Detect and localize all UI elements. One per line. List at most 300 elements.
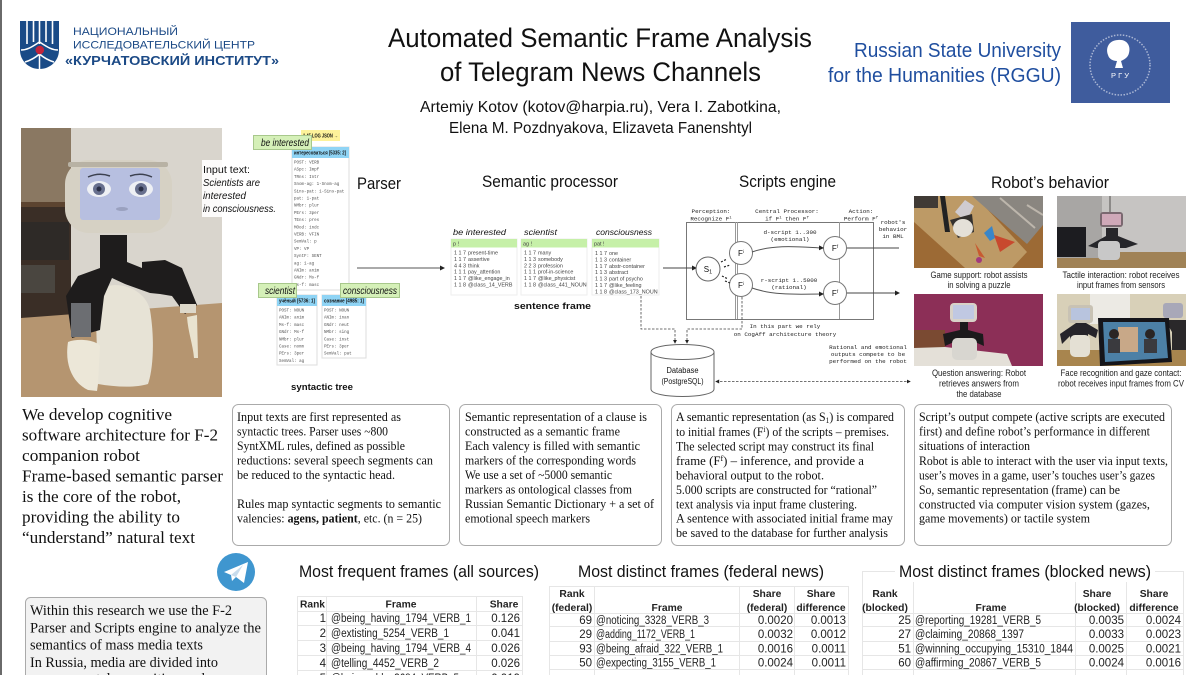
caption: question answering: the database [956, 388, 1002, 399]
panel: parser description: valencies: agens, patient, etc. (n = 25) [237, 512, 422, 526]
panel: parser description [232, 404, 450, 546]
photo: tactile interaction [1057, 196, 1186, 268]
frame: scientist: ag ! [523, 242, 532, 248]
frame: be interested: pay_attention [468, 270, 500, 276]
table: most frequent frames: @being_having_1794_VERB_4 [331, 643, 472, 655]
frame: scientist: somebody [538, 257, 563, 263]
main tree node: SemVal: p [294, 240, 317, 245]
university name: Russian State University [854, 40, 1061, 62]
panel: parser description: be reduced to the syntactic head. [237, 468, 395, 482]
log toolbar: 1.45 LOG JSON → [303, 134, 338, 140]
panel: scripts engine description: be saved to the database for further analysis [676, 526, 888, 540]
table: distinct frames federal: 50 [579, 658, 592, 670]
table: distinct frames federal: Frame [652, 603, 683, 614]
table: distinct frames federal: @being_afraid_322_VERB_1 [596, 644, 723, 656]
node: scientist: Case: nomn [279, 346, 305, 350]
main tree node: NMbr: plur [294, 204, 320, 209]
database [651, 344, 714, 396]
panel: scripts engine description: A sentence with associated initial frame may [676, 512, 894, 526]
table: distinct frames blocked: @reporting_19281_VERB_5 [915, 615, 1041, 627]
panel: robot behavior description: So, semantic representation (frame) can be [919, 483, 1120, 497]
scripts engine diagram: (rational) [771, 284, 807, 291]
node: consciousness [322, 295, 366, 358]
table: distinct frames blocked: 0.0024 [1089, 658, 1125, 670]
logo: Kurchatov Institute: «КУРЧАТОВСКИЙ ИНСТИТУТ» [65, 53, 279, 68]
caption: syntactic tree: syntactic tree [291, 382, 353, 393]
table: distinct frames federal: 0.0016 [758, 644, 793, 656]
table: distinct frames federal: 0.0012 [811, 629, 846, 641]
robot head [65, 160, 172, 233]
arrows: dashed links to database [641, 296, 910, 382]
authors: Artemiy Kotov (kotov@harpia.ru), Vera I. Zabotkina, [420, 99, 781, 116]
panel: robot behavior description: first) and define robot’s performance in different [919, 424, 1150, 438]
frame: consciousness: @like_feeling [609, 283, 641, 289]
panel: scripts engine description: to initial frames (F [676, 425, 770, 439]
panel: parser description: reductions: several speech segments can [237, 454, 434, 468]
label: be interested: be interested [261, 138, 309, 149]
main tree node: MOod: indc [294, 225, 320, 230]
logo: RGGU [1071, 22, 1170, 103]
node: F1 final: F [832, 244, 837, 253]
node: S1 [696, 257, 720, 281]
frame: be interested: @like_engage_in [468, 276, 510, 282]
table: distinct frames blocked: 0.0025 [1089, 644, 1124, 656]
table: distinct frames blocked: @winning_occupying_15310_1844 [915, 644, 1074, 656]
table: distinct frames blocked: 60 [898, 658, 911, 670]
panel: scripts engine description: 5.000 scripts are constructed for “rational” [676, 483, 877, 497]
heading: distinct frames blocked: Most distinct frames (blocked news) [899, 562, 1151, 581]
scripts engine diagram: Central Processor: [755, 208, 819, 215]
heading: parser: Parser [357, 174, 401, 193]
table: distinct frames blocked: 0.0021 [1146, 644, 1181, 656]
frame: be interested: think [468, 263, 480, 269]
panel: research scope [26, 598, 266, 675]
panel: scripts engine description: ) of the scripts – premises. [766, 425, 889, 439]
table: distinct frames federal: Share [753, 589, 782, 600]
frame: consciousness: 1 1 7 [595, 283, 607, 289]
scripts engine diagram: Perform F [844, 216, 876, 222]
table: distinct frames federal: 69 [579, 615, 592, 627]
label: consciousness [340, 284, 400, 298]
photo: game support [914, 196, 1043, 268]
logo: Kurchatov Institute [20, 21, 279, 69]
table: distinct frames blocked: @claiming_20868_1397 [915, 629, 1024, 641]
frame: consciousness: 1 1 3 [595, 277, 607, 283]
frame: be interested: 1 1 1 [454, 270, 466, 276]
main tree node [292, 147, 349, 290]
table: distinct frames federal: difference [796, 603, 846, 614]
scripts engine diagram: f [876, 216, 879, 220]
panel: research scope: Within this research we use the F-2 [30, 603, 232, 619]
main tree node: ASpc: Impf [294, 168, 320, 173]
table: most frequent frames: 0.126 [491, 613, 520, 625]
caption: question answering [932, 367, 1026, 399]
frame: be interested: present-time [468, 250, 498, 256]
panel: scripts engine description: f [720, 454, 724, 463]
frame: scientist: prof-in-science [538, 270, 573, 276]
main tree node: VERB: VFIN [294, 234, 320, 238]
table: most frequent frames [297, 596, 523, 675]
scripts engine diagram: Action: [849, 208, 873, 215]
caption: game support: in solving a puzzle [948, 279, 1010, 290]
main tree node: Snom-ag: 1-Snom-ag [294, 183, 340, 187]
table: distinct frames federal: 0.0011 [812, 658, 846, 670]
panel: semantic processor description: Semantic representation of a clause is [465, 410, 647, 424]
table: most frequent frames: @extisting_5254_VERB_1 [331, 628, 449, 640]
table: distinct frames blocked: Share [1140, 589, 1169, 600]
table: distinct frames blocked: 0.0023 [1146, 629, 1181, 641]
frame: scientist: 1 1 1 [524, 270, 536, 276]
frame: consciousness: container [609, 257, 631, 263]
node: consciousness: Case: inst [324, 337, 350, 342]
heading: semantic processor: Semantic processor [482, 172, 618, 191]
input text: interested [203, 190, 247, 202]
frame: scientist: 1 1 7 [524, 250, 536, 256]
frame: scientist: scientist [524, 227, 558, 237]
table: most frequent frames: Share [490, 600, 519, 610]
table: distinct frames blocked: 25 [898, 615, 911, 627]
caption: tactile interaction: Tactile interaction: robot receives [1062, 269, 1180, 280]
table: most frequent frames: Frame [386, 600, 417, 610]
node: scientist: Ms-f: masc [279, 323, 305, 328]
node: consciousness: GNdr: neut [324, 323, 350, 328]
table: distinct frames blocked: 27 [898, 629, 911, 641]
frame: consciousness: 1 1 3 [595, 270, 607, 276]
frame: consciousness: 1 1 7 [595, 264, 607, 270]
frame: scientist: 2 2 3 [524, 263, 536, 269]
scripts engine diagram: behavior [879, 226, 907, 233]
table: distinct frames federal: Rank [559, 589, 585, 600]
frame: be interested: be interested [453, 227, 506, 237]
table: most frequent frames: Rank [300, 600, 325, 610]
main tree node: pat: 1-pat [294, 198, 320, 202]
database: (PostgreSQL) [662, 377, 704, 386]
label: be interested [254, 136, 312, 150]
node: F2 initial: i [743, 281, 744, 286]
panel: scripts engine description: behavioral output to the robot. [676, 468, 824, 482]
text block: cognitive architecture intro [22, 405, 223, 547]
frame: be interested: 1 1 8 [454, 282, 466, 288]
frame: consciousness: 1 1 7 [595, 251, 607, 257]
panel: robot behavior description: situations of interaction [919, 439, 1031, 453]
node: consciousness: сознание [4985: 1] [324, 298, 364, 304]
table: most frequent frames: 2 [320, 628, 326, 640]
title: of Telegram News Channels [440, 57, 761, 87]
table: distinct frames federal: (federal) [747, 603, 787, 614]
input text: Input text: [203, 164, 250, 176]
table: most frequent frames: 3 [320, 643, 326, 655]
frame: consciousness: abstract [609, 270, 629, 276]
scripts engine diagram: Recognize F [690, 216, 729, 222]
frame: scientist [521, 227, 587, 295]
table: distinct frames blocked: Frame [976, 603, 1007, 614]
table: most frequent frames: 1 [320, 613, 326, 625]
table: distinct frames blocked: @affirming_20867_VERB_5 [915, 658, 1041, 670]
table: distinct frames blocked: 0.0024 [1146, 615, 1182, 627]
panel: semantic processor description: We use a set of ~5000 semantic [465, 468, 612, 482]
title [388, 23, 812, 87]
logo: RGGU: Р Г У [1111, 71, 1129, 80]
table: distinct frames blocked: (blocked) [1074, 603, 1120, 614]
frame: scientist: @like_physicist [538, 276, 576, 282]
parser tree [254, 130, 400, 365]
university name [828, 40, 1061, 87]
caption: game support: Game support: robot assists [930, 269, 1028, 280]
heading: robot's behavior: Robot’s behavior [991, 173, 1109, 192]
frame: consciousness [592, 227, 659, 295]
table: most frequent frames: 4 [320, 658, 327, 670]
robot neck and arms [66, 235, 197, 338]
panel: scripts engine description [672, 404, 904, 546]
panel: parser description: SyntXML rules, defined as possible [237, 439, 405, 453]
arrow: parser to semantic processor [357, 267, 444, 269]
caption: tactile interaction: input frames from sensors [1077, 279, 1165, 290]
table: distinct frames federal: @expecting_3155_VERB_1 [596, 658, 716, 670]
frame: be interested: 1 1 7 [454, 250, 466, 256]
table: distinct frames federal: 0.0024 [758, 658, 794, 670]
label: scientist: scientist [265, 286, 296, 297]
input text [202, 160, 278, 217]
panel: semantic processor description: emotional speech markers [465, 512, 590, 526]
scripts engine diagram: robot's [881, 219, 906, 226]
scripts engine diagram: if F [765, 216, 779, 222]
node: consciousness: POST: NOUN [324, 310, 350, 314]
panel: scripts engine description: 1 [826, 416, 829, 425]
table: distinct frames blocked: 0.0035 [1089, 615, 1124, 627]
main tree node: SyntF: SENT [294, 255, 322, 259]
logo: Kurchatov Institute: ИССЛЕДОВАТЕЛЬСКИЙ ЦЕНТР [73, 38, 255, 52]
table: distinct frames federal: 0.0020 [758, 615, 793, 627]
table: most frequent frames: @being_having_1794_VERB_1 [331, 613, 471, 625]
main tree node: Ms-f: masc [294, 283, 320, 288]
main tree node: Sins-pat: 1-Sins-pat [294, 189, 345, 194]
robot right claw [187, 315, 198, 358]
scripts engine diagram: performed on the robot [829, 358, 907, 365]
frame: consciousness: 1 1 8 [595, 289, 607, 295]
panel: robot behavior description [914, 404, 1172, 546]
node: scientist: SemVal: ag [279, 359, 305, 364]
main tree node: ANIm: anim [294, 268, 320, 274]
node: F1 initial [730, 242, 752, 264]
text block: cognitive architecture intro: Frame-based semantic parser [22, 466, 223, 486]
scripts engine diagram: i [729, 216, 732, 220]
frame: be interested: @class_14_VERB [468, 282, 513, 288]
scripts engine diagram: (emotional) [771, 236, 809, 243]
caption: face recognition [1058, 367, 1185, 388]
node: consciousness: PErs: 3per [324, 346, 350, 350]
node: F1 initial: i [743, 249, 744, 254]
photo: face recognition [1057, 294, 1186, 366]
node: F2 final [824, 282, 846, 304]
table: most frequent frames: 0.026 [491, 643, 520, 655]
table: distinct frames blocked: difference [1129, 603, 1179, 614]
panel: semantic processor description: Russian Semantic Dictionary + a set of [465, 497, 655, 511]
panel: semantic processor description [460, 404, 662, 546]
panel: parser description: Rules map syntactic segments to semantic [237, 497, 441, 511]
table: distinct frames blocked: 0.0033 [1089, 629, 1124, 641]
table: distinct frames blocked: 0.0016 [1146, 658, 1181, 670]
frame: be interested: 1 1 7 [454, 257, 466, 263]
node: F2 initial: F [738, 281, 743, 290]
main tree node: VP: VP [294, 248, 310, 252]
label: consciousness: consciousness [343, 286, 397, 297]
panel: research scope: Parser and Scripts engine to analyze the [30, 620, 261, 636]
text block: cognitive architecture intro: providing the ability to [22, 508, 180, 526]
table: distinct frames federal: (federal) [552, 603, 592, 614]
scripts engine diagram: outputs compete to be [831, 351, 906, 358]
panel: scripts engine description: A semantic representation (as S [676, 410, 835, 424]
caption: tactile interaction [1062, 269, 1180, 290]
panel: scripts engine description: ) is compared [829, 410, 895, 424]
caption: game support [930, 269, 1028, 290]
frame: be interested [451, 227, 517, 295]
frame: consciousness: part of psycho [609, 277, 643, 283]
frame: scientist: profession [538, 263, 563, 269]
title: Automated Semantic Frame Analysis [388, 23, 812, 53]
photo: question answering [914, 294, 1043, 366]
caption: question answering: Question answering: Robot [932, 367, 1026, 378]
panel: scripts engine description: The selected script may construct its final [676, 440, 874, 454]
text block: cognitive architecture intro: “understand” natural text [22, 528, 195, 547]
node: consciousness: ANIm: inan [324, 316, 350, 321]
caption: question answering: retrieves answers from [939, 378, 1019, 388]
frame: consciousness: consciousness [596, 227, 653, 237]
scripts engine diagram: on CogAff architecture theory [734, 331, 837, 338]
node: S1: 1 [709, 270, 712, 276]
sentence frame [451, 227, 659, 295]
panel: scripts engine description: i [763, 425, 766, 434]
node: scientist: PErs: 3per [279, 353, 305, 357]
node: S1: S [704, 265, 709, 274]
authors [420, 99, 781, 137]
table: most frequent frames: 0.026 [491, 658, 520, 670]
node: scientist [277, 295, 317, 365]
caption: sentence frame: sentence frame [514, 301, 591, 312]
heading: most frequent frames: Most frequent frames (all sources) [299, 562, 539, 581]
icon: telegram [217, 553, 255, 591]
panel: robot behavior description: game movements) or tactile system [919, 512, 1090, 526]
text block: cognitive architecture intro: is the core of the robot, [22, 487, 181, 506]
table: distinct frames federal: 0.0011 [812, 644, 846, 656]
panel: robot behavior description: user’s moves in a game, user’s touches user’s gazes [919, 468, 1155, 482]
node: F2 final: F [832, 289, 837, 298]
table: most frequent frames: @telling_4452_VERB_2 [331, 658, 439, 670]
panel: research scope: semantics of mass media texts [30, 638, 203, 654]
frame: consciousness: abstr-container [609, 264, 645, 270]
panel: semantic processor description: constructed as a semantic frame [465, 424, 620, 438]
table: distinct frames blocked: Share [1083, 589, 1112, 600]
input text: Scientists are [203, 177, 260, 189]
table: distinct frames federal: 29 [579, 629, 592, 641]
scripts engine diagram: Rational and emotional [829, 344, 907, 351]
table: distinct frames blocked: (blocked) [862, 603, 908, 614]
frame: scientist: @class_441_NOUN [538, 282, 587, 288]
panel: research scope: In Russia, media are divided into [30, 655, 218, 671]
scripts engine diagram: in BML [882, 233, 904, 240]
heading: scripts engine: Scripts engine [739, 172, 836, 191]
frame: consciousness: @class_173_NOUN [609, 289, 658, 295]
scripts engine diagram [663, 208, 907, 365]
table: distinct frames blocked: 51 [898, 644, 911, 656]
robot left hand [67, 340, 100, 391]
scripts engine diagram: d-script 1..300 [763, 229, 817, 236]
table: distinct frames federal: Share [807, 589, 836, 600]
frame: scientist: 1 1 3 [524, 257, 536, 263]
node: F1 initial: F [738, 249, 743, 258]
scripts engine diagram: r-script 1..5000 [761, 277, 818, 284]
node: F2 final: f [837, 289, 839, 294]
authors: Elena M. Pozdnyakova, Elizaveta Fanenshtyl [449, 120, 752, 137]
input text: in consciousness. [203, 203, 276, 215]
panel: semantic processor description: markers of the corresponding words [465, 454, 636, 468]
text block: cognitive architecture intro: companion robot [22, 446, 140, 465]
main tree node: ag: 1-ag [294, 262, 315, 266]
node: consciousness: NMbr: sing [324, 330, 350, 335]
table: distinct frames federal: 0.0013 [811, 615, 846, 627]
node: scientist: GNdr: Ms-f [279, 330, 305, 335]
frame: be interested: p ! [453, 242, 459, 248]
scripts engine diagram: then F [782, 216, 807, 222]
table: distinct frames federal: 93 [579, 644, 592, 656]
panel: semantic processor description: markers as ontological classes from [465, 482, 632, 496]
node: F1 final: f [837, 244, 839, 249]
log toolbar [301, 130, 340, 141]
node: scientist: учёный [5736: 1] [279, 298, 315, 304]
scripts engine diagram: In this part we rely [750, 323, 821, 330]
text block: cognitive architecture intro: software architecture for F-2 [22, 426, 218, 444]
panel: parser description: syntactic trees. Parser uses ~800 [237, 424, 388, 438]
table: distinct frames federal [549, 586, 848, 675]
table: distinct frames federal: 0.0032 [758, 629, 793, 641]
frame: be interested: 1 1 7 [454, 276, 466, 282]
main tree node: интересоваться [5335: 2] [294, 150, 346, 156]
label: scientist [258, 284, 296, 298]
panel: semantic processor description: Each valency is filled with semantic [465, 439, 640, 453]
frame: scientist: 1 1 8 [524, 282, 536, 288]
scripts engine diagram: f [806, 216, 809, 220]
table: distinct frames blocked [862, 571, 1184, 675]
panel: robot behavior description: Robot is able to interact with the user via input texts, [919, 454, 1168, 468]
main tree node: TRns: Intr [294, 176, 320, 180]
panel: robot behavior description: Script’s output compete (active scripts are executed [919, 410, 1166, 424]
scripts engine diagram: Perception: [692, 208, 730, 215]
frame: be interested: assertive [468, 257, 490, 263]
heading: distinct frames federal: Most distinct frames (federal news) [578, 562, 824, 581]
panel: parser description: Input texts are first represented as [237, 410, 401, 424]
frame: consciousness: one [609, 251, 618, 257]
main tree node: PErs: 3per [294, 212, 320, 216]
scripts engine diagram: i [779, 216, 782, 220]
photo: F-2 companion robot [21, 128, 222, 397]
main tree node: TEns: pres [294, 219, 320, 223]
node: scientist: POST: NOUN [279, 310, 305, 314]
table: distinct frames blocked: Rank [872, 589, 898, 600]
node: F1 final [824, 236, 846, 260]
frame: scientist: many [538, 250, 551, 256]
node: scientist: ANIm: anim [279, 316, 305, 321]
frame: scientist: 1 1 7 [524, 276, 536, 282]
table: most frequent frames: 0.041 [491, 628, 520, 640]
table: distinct frames federal: @adding_1172_VERB_1 [596, 629, 695, 641]
panel: scripts engine description: ) – inference, and provide a [723, 454, 864, 468]
panel: robot behavior description: constructed via computer vision system (gazes, [919, 498, 1150, 512]
frame: consciousness: 1 1 3 [595, 257, 607, 263]
university name: for the Humanities (RGGU) [828, 65, 1061, 87]
text block: cognitive architecture intro: We develop cognitive [22, 405, 172, 424]
database: Database [666, 366, 699, 375]
panel: scripts engine description: text analysis via input frame clustering. [676, 498, 857, 512]
node: F2 initial [730, 274, 752, 296]
